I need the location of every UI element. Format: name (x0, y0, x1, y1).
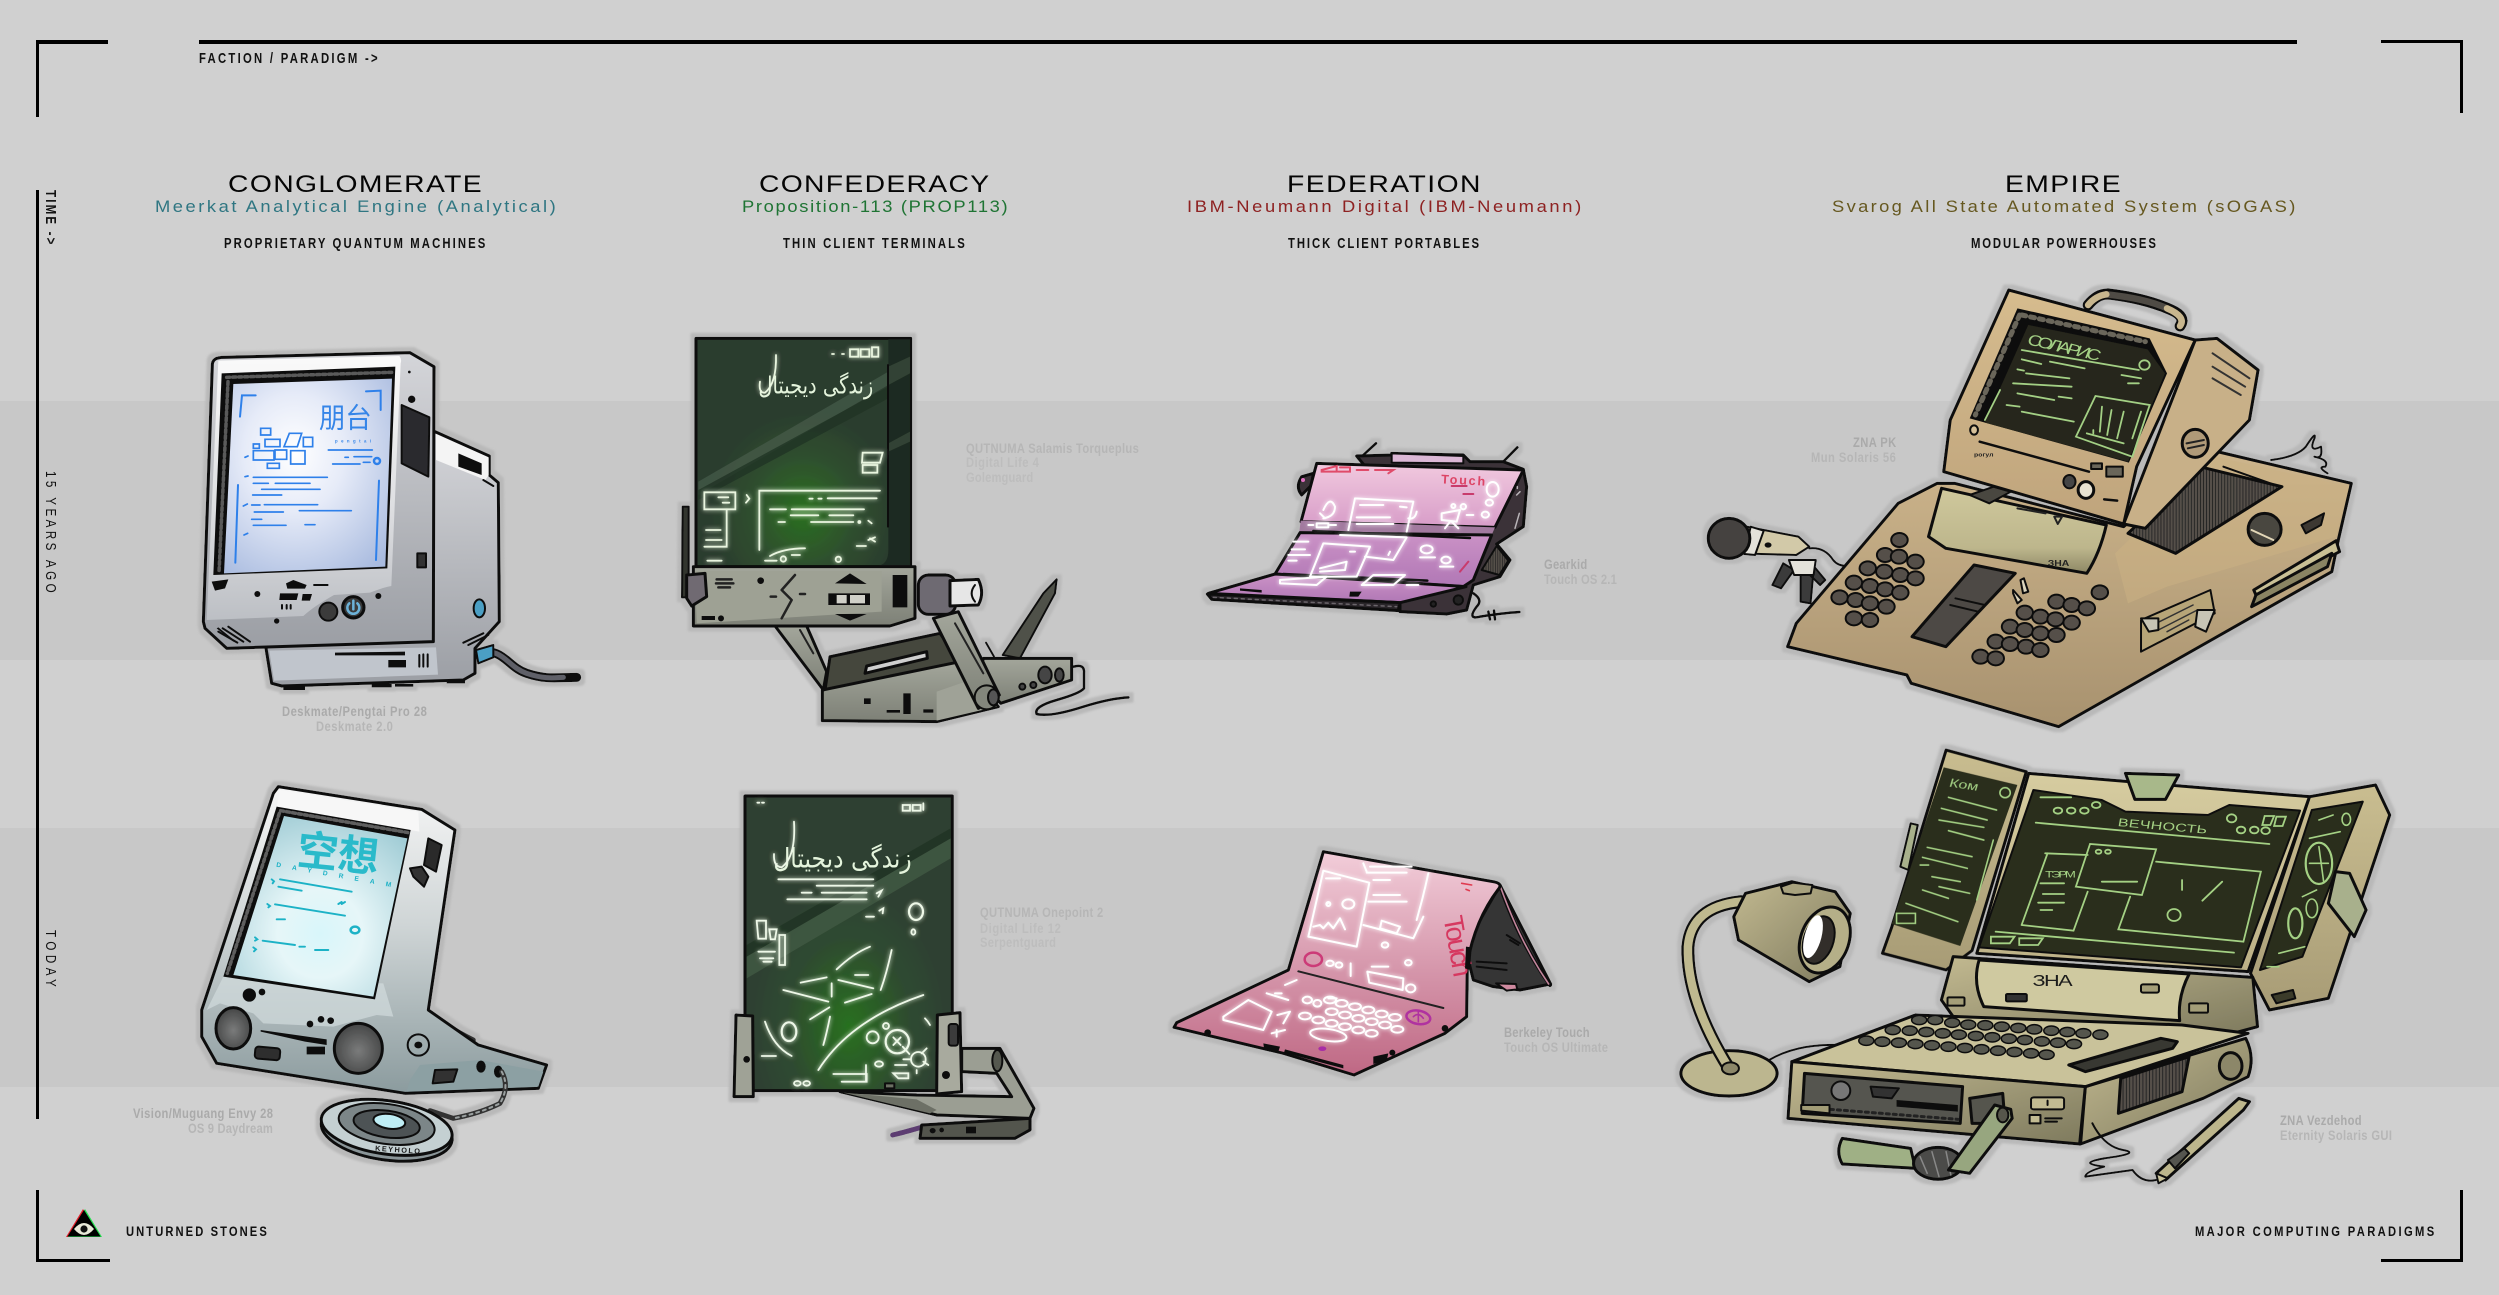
footer title: MAJOR COMPUTING PARADIGMS (2195, 1224, 2434, 1239)
column heading: conglomerate (155, 170, 556, 251)
side clamps (734, 1013, 962, 1097)
centre screen (1977, 773, 2309, 972)
side vent (402, 405, 429, 477)
coiled cable (2271, 436, 2327, 473)
caption: Berkeley Touch (1504, 1025, 1608, 1055)
caption: QUTNUMA Salamis Torqueplus (966, 441, 1139, 485)
desk lamp (1681, 882, 1857, 1096)
column heading: conglomerate: PROPRIETARY QUANTUM MACHINES (224, 235, 486, 251)
cable (1036, 666, 1128, 715)
column heading: confederacy: CONFEDERACY (759, 170, 989, 197)
left screen panel: Ком (1948, 776, 1980, 793)
axis label: time: TIME -> (43, 190, 59, 245)
caption: Gearkid: Gearkid (1544, 557, 1587, 572)
main body (1788, 450, 2351, 727)
column heading: empire (1832, 170, 2295, 251)
caption: ZNA PK: Mun Solaris 56 (1811, 450, 1896, 465)
hinge roller: ЗНА (2032, 972, 2073, 989)
keyboard base (1788, 1015, 2251, 1144)
stylus clip (682, 507, 689, 597)
axis label: faction / paradigm: FACTION / PARADIGM -> (199, 50, 378, 66)
timeline band: 15 years ago (0, 401, 2499, 660)
caption: Vision/Muguang Envy 28: Vision/Muguang Envy 28 (133, 1106, 273, 1121)
caption: QUTNUMA Onepoint 2: Serpentguard (980, 935, 1056, 950)
screen (696, 338, 911, 567)
column heading: confederacy (742, 170, 1008, 251)
speakers (216, 1008, 382, 1073)
caption: Gearkid: Touch OS 2.1 (1544, 572, 1617, 587)
caption: Deskmate/Pengtai Pro 28 (282, 704, 427, 734)
caption: QUTNUMA Onepoint 2: Digital Life 12 (980, 921, 1061, 936)
device: Berkeley Touch (1174, 852, 1551, 1075)
monitor: рогул (1974, 452, 1994, 458)
centre screen: ТЭРМ (2045, 870, 2076, 880)
folding display (1174, 852, 1500, 1075)
caption: QUTNUMA Salamis Torqueplus: Golemguard (966, 470, 1033, 485)
screen: 空想 (295, 816, 382, 884)
device: QUTNUMA Onepoint 2 (734, 796, 1034, 1138)
stylus (1003, 579, 1057, 658)
logo: eye in triangle (66, 1209, 102, 1237)
row label: today: TODAY (43, 930, 59, 987)
centre screen: ВЕЧНОСТЬ (2117, 815, 2208, 836)
row label: 15 years ago: 15 YEARS AGO (43, 471, 59, 593)
folding display: Touch (1437, 913, 1479, 979)
right screen panel (2250, 785, 2390, 1010)
screen: pengtai (335, 439, 371, 444)
device: ZNA PK (1708, 290, 2351, 727)
caption: ZNA PK: ZNA PK (1853, 435, 1897, 450)
paper ticket (2141, 590, 2215, 652)
device: ZNA Vezdehod (1681, 750, 2390, 1183)
stylus pen (2085, 1098, 2250, 1183)
support arm (840, 1048, 1034, 1118)
card slot (2254, 541, 2340, 595)
device: QUTNUMA Salamis Torqueplus (682, 338, 1128, 722)
caption: ZNA PK (1811, 435, 1897, 465)
column heading: empire: MODULAR POWERHOUSES (1971, 235, 2156, 251)
hinge roller (1941, 957, 2258, 1035)
screen (223, 807, 411, 999)
keyhole controller (317, 1072, 505, 1169)
column heading: confederacy: THIN CLIENT TERMINALS (783, 235, 965, 251)
screen: زندگی دیجیتال (758, 371, 873, 399)
screen: DAYDREAM (276, 862, 392, 889)
column heading: empire: Svarog All State Automated System (sOGAS) (1832, 197, 2295, 216)
roller (918, 575, 982, 614)
column heading: conglomerate: Meerkat Analytical Engine (Analytical) (155, 197, 556, 216)
caption: ZNA Vezdehod: Eternity Solaris GUI (2280, 1128, 2392, 1143)
caption: Vision/Muguang Envy 28 (133, 1106, 273, 1136)
tray slot (1912, 565, 2015, 647)
column heading: federation: THICK CLIENT PORTABLES (1288, 235, 1479, 251)
roller printer (1929, 488, 2106, 573)
screen: 朋台 (319, 396, 372, 436)
column heading: federation (1187, 170, 1581, 251)
right keypad (1972, 585, 2108, 665)
microphone (1708, 518, 1855, 603)
caption: QUTNUMA Salamis Torqueplus: QUTNUMA Salamis Torqueplus (966, 441, 1139, 456)
power cable (476, 645, 577, 678)
caption: QUTNUMA Onepoint 2 (980, 905, 1103, 950)
left screen panel (1882, 750, 2026, 970)
screen (745, 796, 952, 1091)
column heading: confederacy: Proposition-113 (PROP113) (742, 197, 1008, 216)
vent grille (2128, 467, 2282, 553)
screen (213, 367, 395, 575)
keycaps (1859, 1015, 2108, 1059)
caption: ZNA Vezdehod (2280, 1113, 2392, 1143)
caption: QUTNUMA Salamis Torqueplus: Digital Life 4 (966, 455, 1039, 470)
device: Gearkid (1207, 443, 1527, 619)
hand crank (1839, 1093, 2012, 1179)
keyboard cable back (430, 1013, 473, 1040)
rolling display: Touch (1441, 472, 1486, 489)
device: Deskmate/Pengtai Pro 28 (203, 353, 577, 690)
left keypad (1831, 533, 1924, 627)
dial and switch (2248, 513, 2281, 545)
front controls (212, 371, 415, 643)
caption: Gearkid (1544, 557, 1617, 587)
caption: Berkeley Touch: Berkeley Touch (1504, 1025, 1590, 1040)
screen: زندگی دیجیتال (773, 843, 912, 874)
monitor (1944, 290, 2258, 528)
timeline band: today (0, 828, 2499, 1087)
rolling display (1207, 463, 1523, 611)
caption: Deskmate/Pengtai Pro 28: Deskmate 2.0 (316, 719, 393, 734)
device: Vision/Muguang Envy 28 (202, 787, 547, 1169)
caption: ZNA Vezdehod: ZNA Vezdehod (2280, 1113, 2362, 1128)
caption: QUTNUMA Onepoint 2: QUTNUMA Onepoint 2 (980, 905, 1103, 920)
column heading: federation: IBM-Neumann Digital (IBM-Neumann) (1187, 197, 1581, 216)
caption: Deskmate/Pengtai Pro 28: Deskmate/Pengtai Pro 28 (282, 704, 427, 719)
column heading: conglomerate: CONGLOMERATE (228, 170, 482, 197)
carry handle (2088, 294, 2182, 326)
caption: Berkeley Touch: Touch OS Ultimate (1504, 1040, 1608, 1055)
caption: Vision/Muguang Envy 28: OS 9 Daydream (188, 1121, 273, 1136)
column heading: empire: EMPIRE (2005, 170, 2121, 197)
footer brand: UNTURNED STONES (126, 1224, 267, 1239)
device: ZNA PK: ЗНА (2048, 559, 2070, 568)
port panel (1802, 1073, 1963, 1123)
keyhole controller: KEYHOLO (375, 1144, 421, 1156)
monitor: СОЛАРИС (2025, 331, 2104, 364)
column heading: federation: FEDERATION (1287, 170, 1481, 197)
